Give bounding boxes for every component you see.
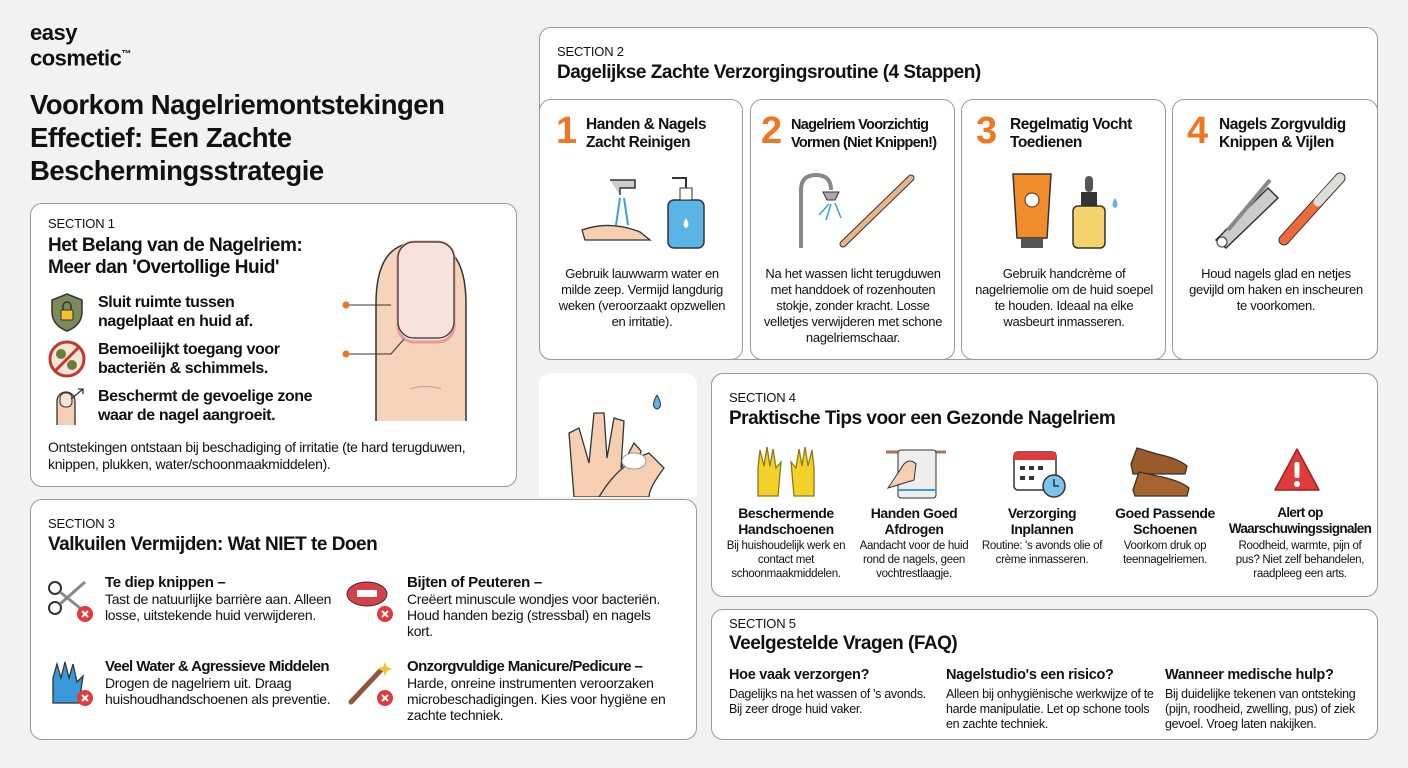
- step title 2: [791, 117, 936, 151]
- panel: section 3: [30, 499, 697, 740]
- text: Harde, onreine instrumenten veroorzaken microbeschadigingen. Kies voor hygiëne en zachte techniek.: [407, 675, 666, 723]
- card: step 3: [961, 99, 1166, 360]
- step title 2: Nagelriem Voorzichtig: [791, 117, 928, 133]
- step title 3: Toedienen: [1010, 134, 1082, 151]
- tip 1: Bij huishoudelijk werk en contact met schoonmaakmiddelen.: [727, 540, 845, 580]
- text: bemoeilijkt: bacteriën & schimmels.: [98, 360, 268, 377]
- heading 3: Valkuilen Vermijden: Wat NIET te Doen: [48, 534, 377, 555]
- step number 2: 2: [761, 110, 782, 152]
- section label 2: SECTION 2: [557, 44, 624, 59]
- tip 2: [860, 505, 968, 580]
- faq 3: Bij duidelijke tekenen van ontsteking (pijn, roodheid, zwelling, pus) of ziek gevoel. Vroeg laten nakijken.: [1165, 687, 1355, 731]
- card: step 2: [750, 99, 955, 360]
- tip 1: [727, 505, 845, 580]
- step number 3: 3: [976, 110, 997, 152]
- icon: shower and stick: [799, 173, 914, 248]
- step number 4: 4: [1187, 110, 1208, 152]
- heading 4: Praktische Tips voor een Gezonde Nagelriem: [729, 408, 1115, 429]
- text: [105, 658, 330, 707]
- step title 1: Handen & Nagels: [586, 116, 706, 133]
- tip 5: Roodheid, warmte, pijn of pus? Niet zelf behandelen, raadpleeg een arts.: [1236, 540, 1364, 580]
- tip 3: Routine: 's avonds olie of crème inmasseren.: [982, 540, 1102, 566]
- illustration panel: hands with cream: [539, 373, 697, 497]
- faq 3: [1165, 667, 1370, 732]
- panel: section 5: [711, 609, 1378, 740]
- icon: cream and oil: [1012, 173, 1118, 249]
- icon: gloves: [757, 446, 815, 497]
- title: Voorkom Nagelriemontstekingen Effectief: Een Zachte Beschermingsstrategie: [30, 89, 444, 186]
- heading 2: Dagelijkse Zachte Verzorgingsroutine (4 Stappen): [557, 62, 981, 83]
- logo: cosmetic™: [30, 45, 131, 70]
- icon: finger: [56, 388, 84, 425]
- tip 4: Goed Passende Schoenen: [1115, 505, 1215, 537]
- text: Te diep knippen –: [105, 574, 225, 591]
- icon: clipper and file: [1215, 172, 1346, 249]
- logo: easy: [30, 20, 77, 45]
- text: Veel Water & Agressieve Middelen: [105, 658, 329, 675]
- section label 5: SECTION 5: [729, 616, 796, 631]
- step title 4: Knippen & Vijlen: [1219, 134, 1334, 151]
- icon: tool: [348, 662, 393, 706]
- step title 4: [1219, 116, 1346, 151]
- panel: section 4: [711, 373, 1378, 597]
- faq 3: Wanneer medische hulp?: [1165, 667, 1334, 683]
- section label 4: SECTION 4: [729, 390, 796, 405]
- faq 1: [729, 667, 926, 716]
- tip 3: [982, 505, 1102, 566]
- text: beschermt: [98, 388, 312, 424]
- text: bemoeilijkt: Bemoeilijkt toegang voor: [98, 341, 280, 358]
- panel: section 2: [539, 27, 1378, 360]
- tip 4: [1115, 505, 1215, 566]
- text: [105, 574, 331, 623]
- panel: section 1: [30, 203, 517, 487]
- card: step 4: [1172, 99, 1378, 360]
- tip 4: Voorkom druk op teennagelriemen.: [1123, 540, 1207, 566]
- text: bemoeilijkt: [98, 341, 280, 377]
- icon: shield: [51, 293, 83, 332]
- faq 2: Nagelstudio's een risico?: [946, 667, 1114, 683]
- step number 1: 1: [556, 110, 577, 152]
- text: Drogen de nagelriem uit. Draag huishoudhandschoenen als preventie.: [105, 675, 330, 707]
- text: beschermt: Beschermt de gevoelige zone: [98, 388, 312, 405]
- icon: shoes: [1130, 447, 1190, 497]
- text: Creëert minuscule wondjes voor bacteriën. Houd handen bezig (stressbal) en nagels kort.: [407, 591, 660, 639]
- text step 3: Gebruik handcrème of nagelriemolie om de huid soepel te houden. Ideaal na elke wasbeurt inmasseren.: [975, 266, 1153, 329]
- step title 2: Vormen (Niet Knippen!): [791, 135, 936, 151]
- faq 2: Alleen bij onhygiënische werkwijze of te harde manipulatie. Let op schone tools en zachte techniek.: [946, 687, 1154, 731]
- step title 4: Nagels Zorgvuldig: [1219, 116, 1346, 133]
- tip 3: Verzorging Inplannen: [1008, 505, 1076, 537]
- icon: mouth: [346, 582, 393, 622]
- faq 2: [946, 667, 1154, 731]
- step title 1: [586, 116, 706, 151]
- tip 5: Alert op Waarschuwingssignalen: [1229, 505, 1371, 536]
- icon: glove: [52, 662, 93, 706]
- text: Tast de natuurlijke barrière aan. Alleen losse, uitstekende huid verwijderen.: [105, 591, 331, 623]
- icon: warning: [1274, 448, 1320, 491]
- text step 2: Na het wassen licht terugduwen met handdoek of rozenhouten stokje, zonder kracht. Losse velletjes verwijderen met schone nagelriemschaar.: [764, 266, 942, 345]
- text: beschermt: waar de nagel aangroeit.: [98, 407, 275, 424]
- footer text 1: Ontstekingen ontstaan bij beschadiging of irritatie (te hard terugduwen, knippen, plukken, water/schoonmaakmiddelen).: [48, 439, 465, 472]
- item: bijten: [346, 574, 660, 639]
- text: sluit: Sluit ruimte tussen: [98, 294, 234, 311]
- illustration: finger nail: [342, 240, 467, 421]
- tip 2: Aandacht voor de huid rond de nagels, geen vochtrestlaagje.: [860, 540, 968, 580]
- text step 1: Gebruik lauwwarm water en milde zeep. Vermijd langdurig weken (veroorzaakt opzwellen en irritatie).: [559, 266, 725, 329]
- icon: calendar: [1013, 451, 1066, 498]
- faq 1: Dagelijks na het wassen of 's avonds. Bij zeer droge huid vaker.: [729, 687, 926, 716]
- icon: scissors: [48, 581, 93, 622]
- step title 3: [1010, 116, 1132, 151]
- text: sluit: nagelplaat en huid af.: [98, 313, 253, 330]
- card: step 1: [539, 99, 743, 360]
- logo: [30, 20, 131, 70]
- heading 5: Veelgestelde Vragen (FAQ): [729, 633, 957, 654]
- item: onzorgvuldige manicure: [348, 658, 666, 723]
- text: sluit: [98, 294, 253, 330]
- icon: no bacteria: [48, 340, 86, 378]
- tip 1: Beschermende Handschoenen: [738, 505, 834, 537]
- item: veel water: [52, 658, 330, 707]
- text step 4: Houd nagels glad en netjes gevijld om haken en inscheuren te voorkomen.: [1189, 266, 1363, 313]
- tip 5: [1228, 505, 1372, 580]
- text: Onzorgvuldige Manicure/Pedicure –: [407, 658, 642, 675]
- icon: washing hands: [581, 177, 705, 249]
- faq 1: Hoe vaak verzorgen?: [729, 667, 869, 683]
- step title 3: Regelmatig Vocht: [1010, 116, 1132, 133]
- section label 3: SECTION 3: [48, 516, 115, 531]
- text: Bijten of Peuteren –: [407, 574, 542, 591]
- heading 1: Het Belang van de Nagelriem: Meer dan 'Overtollige Huid': [48, 235, 302, 278]
- step title 1: Zacht Reinigen: [586, 134, 690, 151]
- section label 1: SECTION 1: [48, 216, 115, 231]
- icon: towel: [886, 450, 946, 498]
- tip 2: Handen Goed Afdrogen: [871, 505, 957, 537]
- item: te diep knippen: [48, 574, 331, 623]
